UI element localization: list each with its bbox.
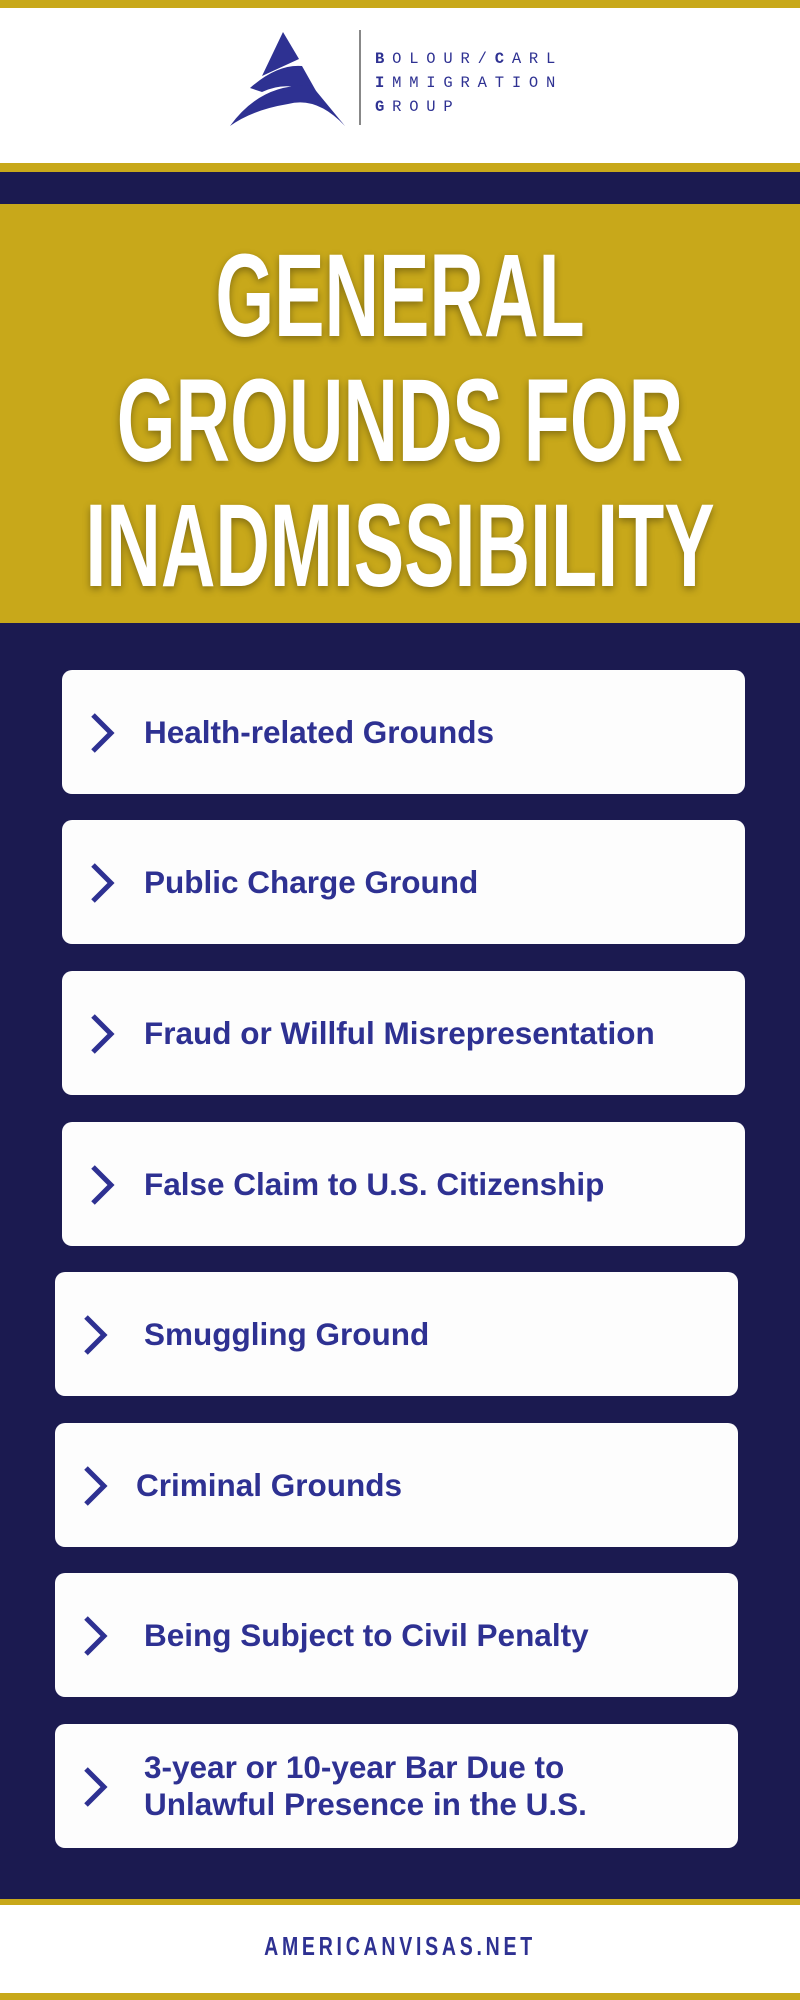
card: civil penalty: Being Subject to Civil Penalty [144, 1616, 589, 1652]
card: criminal: Criminal Grounds [136, 1466, 402, 1502]
footer url: AMERICANVISAS.NET [264, 1931, 536, 1961]
card: health [62, 670, 745, 794]
card: smuggling: Smuggling Ground [144, 1316, 429, 1352]
title: GROUNDS FOR [117, 355, 683, 487]
card: criminal [55, 1423, 738, 1547]
logo text [375, 50, 563, 116]
title: INADMISSIBILITY [85, 480, 715, 612]
card: public charge: Public Charge Ground [144, 864, 478, 900]
title: GENERAL [215, 230, 585, 362]
title [0, 204, 800, 623]
card: civil penalty [55, 1573, 738, 1697]
footer [0, 1899, 800, 2000]
logo text: IMMIGRATION [375, 74, 563, 92]
header band [0, 0, 800, 204]
card: public charge [62, 820, 745, 944]
card: health: Health-related Grounds [144, 714, 494, 750]
card: unlawful presence: 3-year or 10-year Bar Due to [144, 1749, 564, 1785]
card: unlawful presence [55, 1724, 738, 1848]
card: fraud: Fraud or Willful Misrepresentation [144, 1014, 655, 1050]
logo text: BOLOUR/CARL [375, 50, 563, 68]
card: fraud [62, 971, 745, 1095]
card: unlawful presence: Unlawful Presence in the U.S. [144, 1786, 587, 1822]
logo text: GROUP [375, 98, 461, 116]
icon: triangle logo [230, 32, 345, 126]
logo [230, 30, 563, 126]
card: smuggling [55, 1272, 738, 1396]
card: false claim: False Claim to U.S. Citizenship [144, 1166, 604, 1202]
card: false claim [62, 1122, 745, 1246]
